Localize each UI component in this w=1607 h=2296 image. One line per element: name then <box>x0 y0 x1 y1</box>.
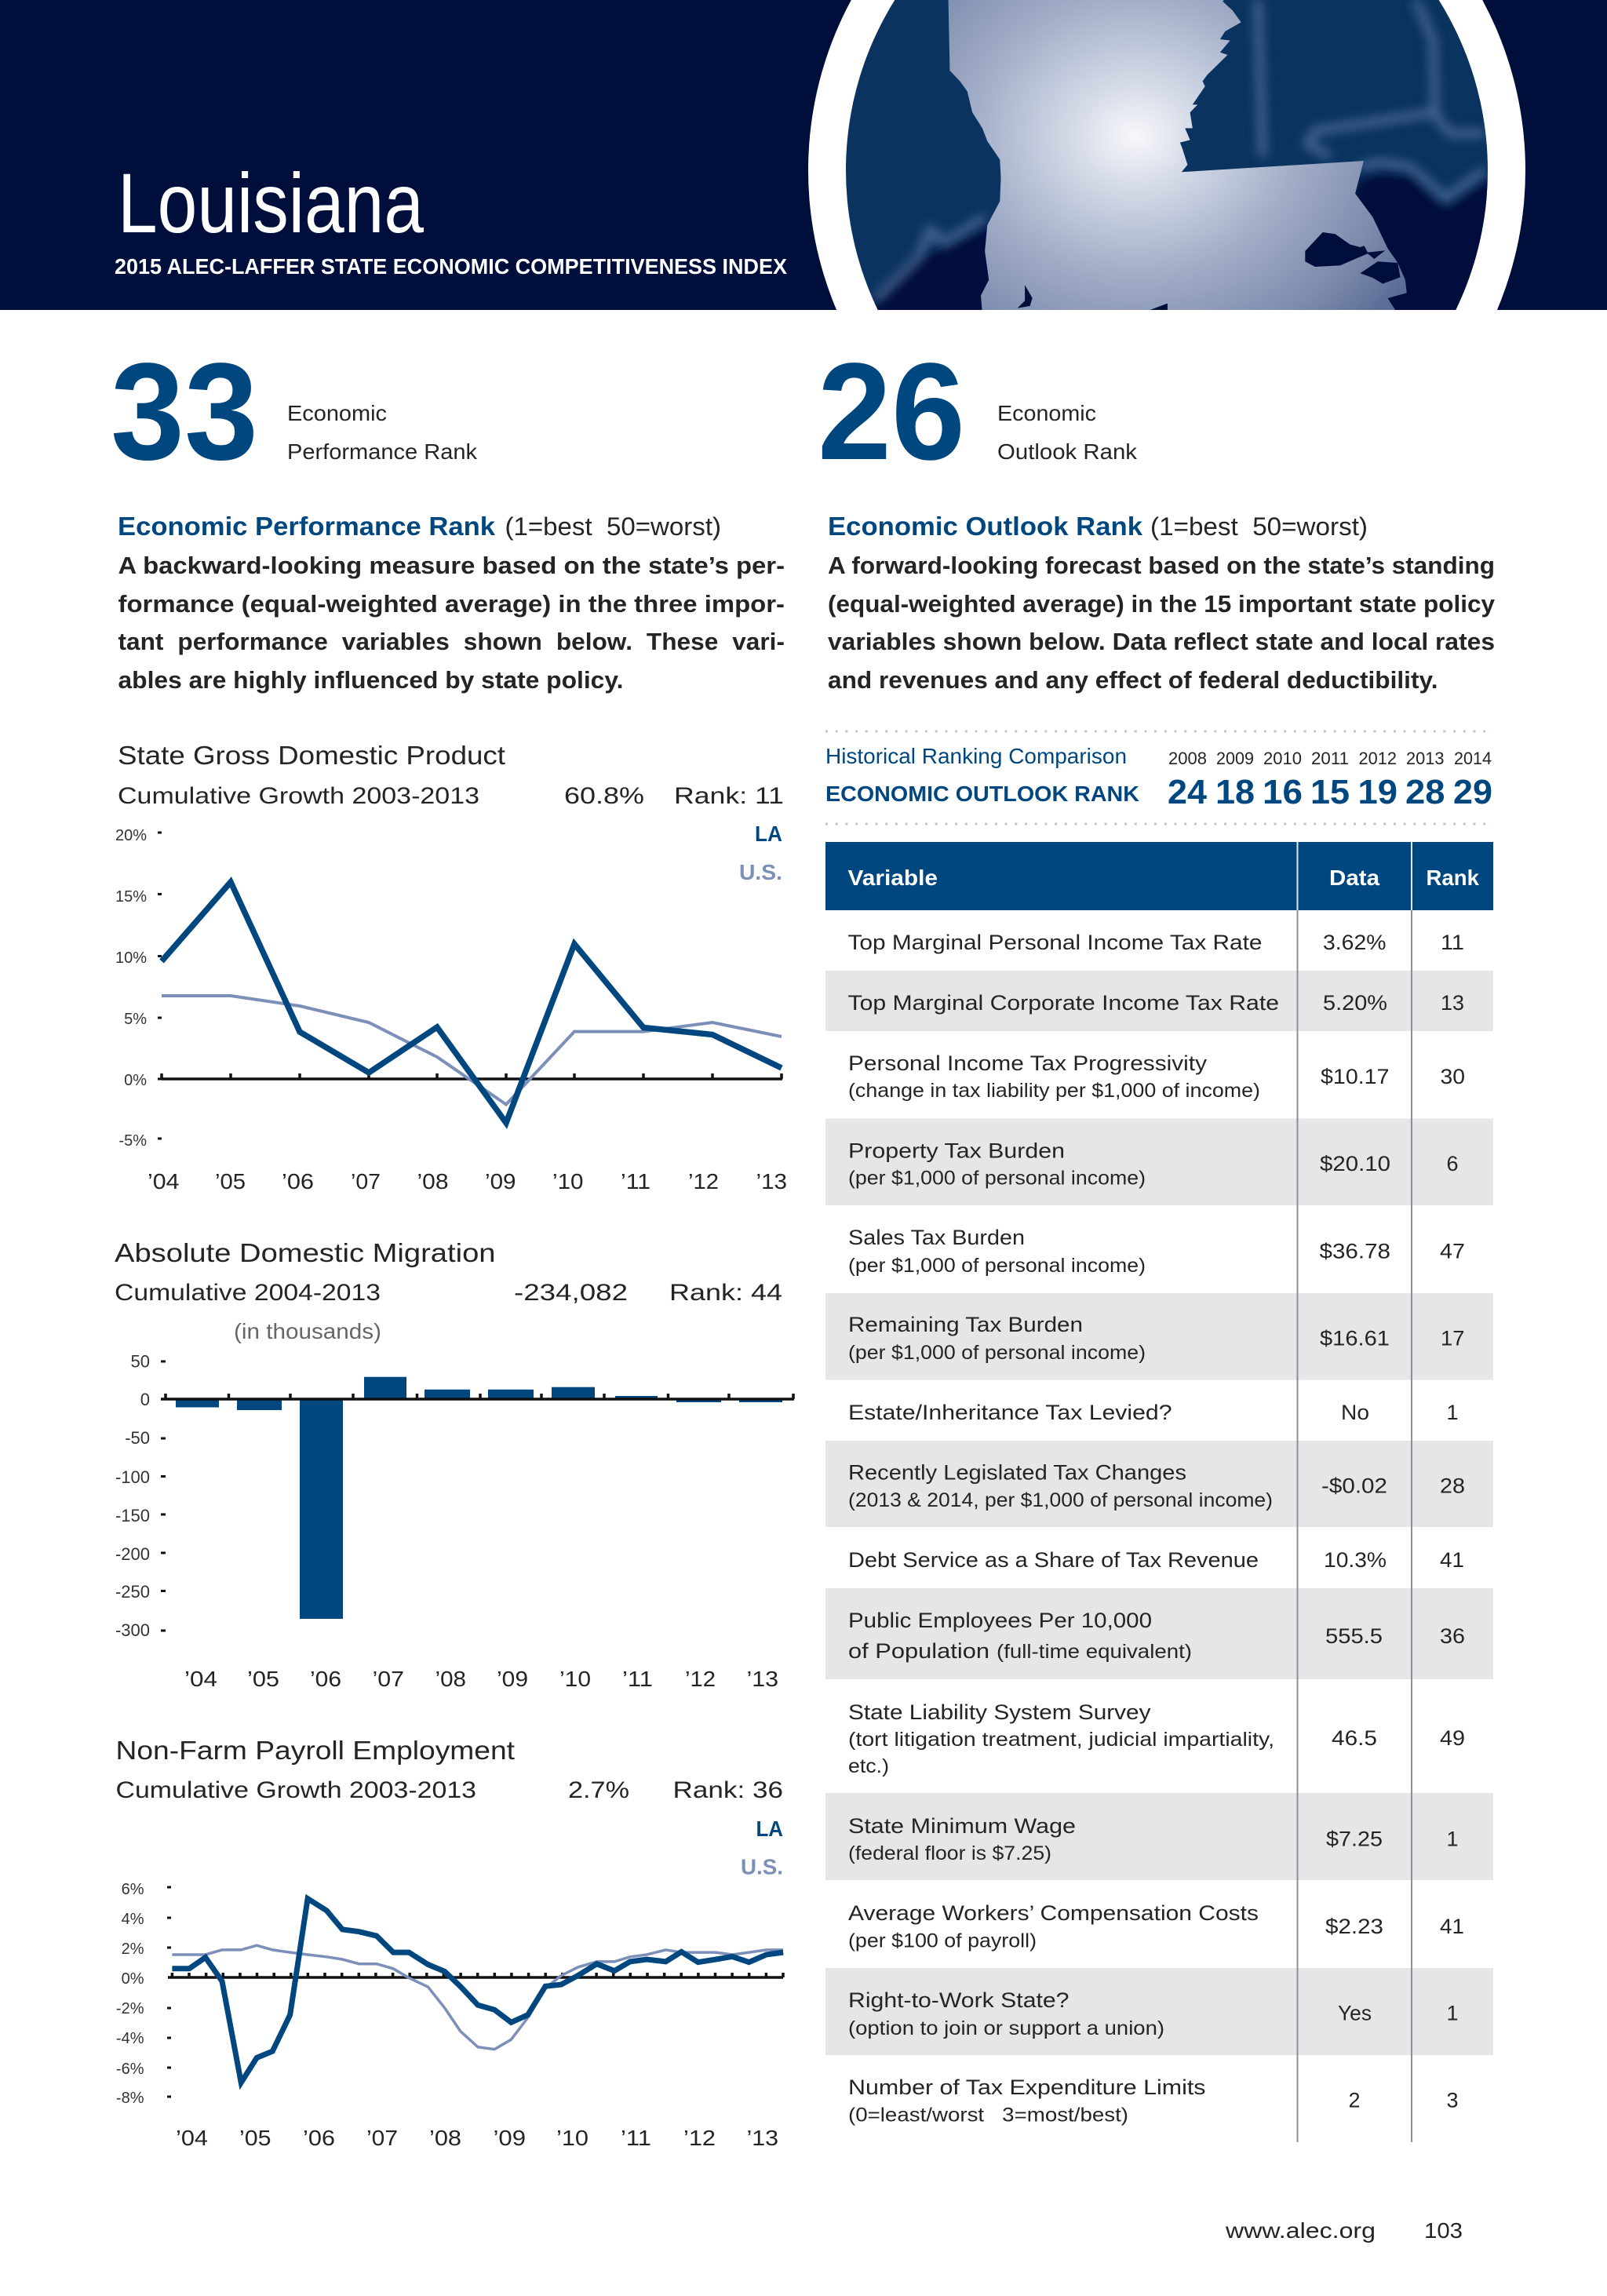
row: property tax burden <box>848 1139 1459 1190</box>
row: workers compensation: (per $100 of payroll) <box>848 1930 1037 1952</box>
row: public employees: 555.5 <box>1325 1624 1383 1648</box>
row: personal income tax progressivity: 30 <box>1441 1065 1465 1088</box>
x axis labels: ’06 <box>282 1169 314 1194</box>
zero axis <box>161 1394 794 1399</box>
title: Louisiana <box>118 155 425 250</box>
x axis labels <box>176 2126 778 2150</box>
row: remaining tax burden: 17 <box>1441 1326 1464 1350</box>
row: personal income tax progressivity: Personal Income Tax Progressivity <box>848 1051 1208 1075</box>
chart heading: Rank: 11 <box>674 783 784 809</box>
years <box>1168 749 1492 768</box>
x axis labels <box>148 1169 787 1194</box>
score: economic outlook rank 26 <box>818 335 1138 489</box>
bars <box>176 1377 782 1619</box>
x axis labels: ’09 <box>497 1667 528 1691</box>
row: top marginal corporate income tax rate: Top Marginal Corporate Income Tax Rate <box>847 991 1279 1015</box>
row: debt service: 41 <box>1440 1548 1464 1572</box>
y axis: -8% <box>116 2090 144 2107</box>
row: debt service: 10.3% <box>1324 1548 1387 1572</box>
footer: www.alec.org <box>1225 2218 1376 2243</box>
years: 2008 <box>1168 749 1207 768</box>
row: personal income tax progressivity <box>848 1051 1465 1102</box>
x axis labels: ’06 <box>310 1667 341 1691</box>
x axis labels: ’10 <box>559 1667 591 1691</box>
y axis: -100 <box>115 1467 150 1487</box>
row: tax expenditure limits <box>848 2076 1459 2127</box>
chart heading <box>118 741 784 809</box>
zero axis <box>162 1073 782 1079</box>
row: state minimum wage <box>848 1814 1459 1864</box>
row: top marginal corporate income tax rate: 5.20% <box>1323 991 1387 1015</box>
x axis labels: ’05 <box>239 2126 271 2150</box>
y axis: -5% <box>118 1132 147 1150</box>
x axis labels: ’13 <box>756 1169 787 1194</box>
row: property tax burden: 6 <box>1446 1152 1459 1175</box>
yearly ranks: 15 <box>1310 773 1350 811</box>
text block: economic performance description: formance (equal-weighted average) in the three impor- <box>118 590 785 618</box>
row: property tax burden: Property Tax Burden <box>848 1139 1065 1163</box>
row: debt service <box>848 1548 1464 1572</box>
yearly ranks: 28 <box>1405 773 1445 811</box>
x axis labels: ’13 <box>747 2126 778 2150</box>
row: remaining tax burden <box>848 1313 1464 1364</box>
row: estate/inheritance tax levied: 1 <box>1446 1401 1459 1424</box>
row: personal income tax progressivity: $10.17 <box>1321 1065 1389 1088</box>
historical ranking comparison: Historical Ranking Comparison <box>825 744 1127 768</box>
x axis labels: ’07 <box>372 1667 404 1691</box>
chart heading: Absolute Domestic Migration <box>115 1238 496 1267</box>
chart heading: Rank: 44 <box>669 1280 782 1306</box>
chart heading: 2.7% <box>568 1777 629 1803</box>
score: economic performance rank 33: Performance Rank <box>287 439 478 464</box>
x axis labels: ’09 <box>485 1169 516 1194</box>
row: right-to-work <box>848 1988 1459 2039</box>
legend <box>739 822 782 884</box>
table header: Rank <box>1427 866 1479 890</box>
text block: economic performance description <box>118 512 785 694</box>
historical ranking comparison: ECONOMIC OUTLOOK RANK <box>825 782 1139 806</box>
yearly ranks: 18 <box>1215 773 1255 811</box>
x axis labels: ’11 <box>622 1667 653 1691</box>
x axis labels <box>184 1667 778 1691</box>
row: state minimum wage: 1 <box>1446 1827 1459 1850</box>
chart heading: State Gross Domestic Product <box>118 741 505 770</box>
row: workers compensation: $2.23 <box>1325 1915 1383 1938</box>
row: property tax burden: $20.10 <box>1320 1152 1390 1175</box>
alternating row shading <box>825 971 1493 2055</box>
row: recently legislated tax changes: 28 <box>1440 1474 1465 1497</box>
y axis: -300 <box>115 1620 150 1640</box>
row: public employees: (full-time equivalent) <box>997 1641 1192 1663</box>
legend <box>741 1817 783 1879</box>
header banner <box>0 0 1607 310</box>
x axis labels: ’04 <box>148 1169 179 1194</box>
row: public employees: 36 <box>1440 1624 1465 1648</box>
row: top marginal personal income tax rate: 11 <box>1441 931 1464 954</box>
text block: economic performance description: Economic Performance Rank <box>118 512 496 541</box>
row: tax expenditure limits: 2 <box>1348 2089 1361 2112</box>
x axis labels: ’05 <box>247 1667 279 1691</box>
row: state liability system survey <box>848 1700 1465 1777</box>
zero axis <box>168 1973 783 1977</box>
row: sales tax burden <box>848 1226 1465 1277</box>
y axis: 2% <box>122 1941 144 1958</box>
y axis: 6% <box>122 1881 144 1898</box>
x axis labels: ’07 <box>351 1169 381 1194</box>
x axis labels: ’10 <box>556 2126 589 2150</box>
row: sales tax burden: 47 <box>1440 1240 1465 1263</box>
legend: LA <box>755 822 782 846</box>
y axis: -250 <box>115 1582 150 1602</box>
row: right-to-work: Right-to-Work State? <box>848 1988 1069 2012</box>
footer: 103 <box>1424 2218 1463 2243</box>
row: estate/inheritance tax levied: Estate/Inheritance Tax Levied? <box>848 1401 1172 1424</box>
row: sales tax burden: $36.78 <box>1320 1240 1390 1263</box>
yearly ranks: 19 <box>1357 773 1397 811</box>
table header <box>825 842 1493 910</box>
row: state liability system survey: 46.5 <box>1332 1726 1377 1750</box>
text block: economic outlook description: A forward-looking forecast based on the state’s standing <box>828 552 1495 579</box>
row: state minimum wage: State Minimum Wage <box>848 1814 1076 1838</box>
text block: economic outlook description: (equal-weighted average) in the 15 important state policy <box>828 590 1496 618</box>
row: state minimum wage: $7.25 <box>1326 1827 1383 1850</box>
years: 2012 <box>1359 749 1397 768</box>
y axis: -2% <box>116 2000 144 2017</box>
row: personal income tax progressivity: (change in tax liability per $1,000 of income) <box>848 1080 1260 1102</box>
y axis <box>115 827 162 1150</box>
chart: absolute domestic migration <box>115 1238 794 1691</box>
y axis: 50 <box>131 1351 150 1372</box>
row: workers compensation: Average Workers’ Compensation Costs <box>848 1901 1259 1925</box>
row: public employees: Public Employees Per 10,000 <box>848 1609 1152 1632</box>
score: economic outlook rank 26: Economic <box>997 401 1096 425</box>
chart heading <box>115 1238 782 1343</box>
y axis: 0% <box>122 1970 144 1988</box>
yearly ranks: 16 <box>1263 773 1303 811</box>
chart heading: Rank: 36 <box>673 1777 783 1803</box>
row: state liability system survey: etc.) <box>848 1755 889 1777</box>
row: remaining tax burden: (per $1,000 of personal income) <box>848 1342 1146 1364</box>
years: 2010 <box>1263 749 1302 768</box>
text block: economic outlook description: (1=best 50=worst) <box>1150 512 1368 541</box>
x axis labels: ’09 <box>493 2126 526 2150</box>
score: economic performance rank 33 <box>111 335 478 489</box>
x axis labels: ’12 <box>683 2126 716 2150</box>
row: top marginal corporate income tax rate: 13 <box>1441 991 1464 1015</box>
legend: U.S. <box>741 1855 783 1879</box>
row: recently legislated tax changes: Recently Legislated Tax Changes <box>848 1461 1186 1485</box>
years: 2014 <box>1454 749 1492 768</box>
row: top marginal personal income tax rate: Top Marginal Personal Income Tax Rate <box>847 931 1262 954</box>
map medallion: Louisiana state in a white ring <box>808 0 1525 310</box>
row: top marginal personal income tax rate <box>847 931 1464 954</box>
score: economic performance rank 33: Economic <box>287 401 387 425</box>
text block: economic performance description: tant performance variables shown below. These vari- <box>118 628 785 655</box>
y axis: 15% <box>115 888 147 906</box>
table header: Data <box>1329 866 1379 890</box>
line: Louisiana <box>172 1899 783 2083</box>
row: property tax burden: (per $1,000 of personal income) <box>848 1168 1146 1190</box>
y axis: 5% <box>124 1011 147 1028</box>
x axis labels: ’11 <box>621 2126 651 2150</box>
row: public employees <box>848 1609 1465 1663</box>
row: state liability system survey: 49 <box>1440 1726 1465 1750</box>
row: right-to-work: (option to join or support a union) <box>848 2017 1164 2039</box>
row: remaining tax burden: $16.61 <box>1320 1326 1390 1350</box>
x axis labels: ’11 <box>621 1169 650 1194</box>
chart heading: (in thousands) <box>234 1319 381 1343</box>
y axis: -200 <box>115 1544 150 1564</box>
x axis labels: ’07 <box>366 2126 398 2150</box>
x axis labels: ’06 <box>303 2126 335 2150</box>
years: 2009 <box>1216 749 1254 768</box>
years: 2011 <box>1311 749 1349 768</box>
y axis: -150 <box>115 1506 150 1525</box>
chart: state gross domestic product <box>115 741 787 1194</box>
legend: U.S. <box>739 860 782 884</box>
y axis: 0 <box>140 1390 150 1409</box>
row: estate/inheritance tax levied: No <box>1341 1401 1369 1424</box>
x axis labels: ’13 <box>747 1667 778 1691</box>
row: remaining tax burden: Remaining Tax Burden <box>848 1313 1083 1336</box>
chart heading: Cumulative 2004-2013 <box>115 1280 381 1306</box>
text block: economic performance description: ables are highly influenced by state policy. <box>118 666 623 694</box>
text block: economic outlook description: and revenues and any effect of federal deductibility. <box>828 666 1438 694</box>
chart heading <box>116 1736 783 1803</box>
y axis: 20% <box>115 827 147 844</box>
text block: economic outlook description <box>828 512 1496 694</box>
line: U.S. <box>162 996 782 1105</box>
row: sales tax burden: (per $1,000 of personal income) <box>848 1255 1146 1277</box>
x axis labels: ’04 <box>184 1667 217 1691</box>
historical ranking comparison <box>825 731 1493 824</box>
row: sales tax burden: Sales Tax Burden <box>848 1226 1025 1249</box>
x axis labels: ’12 <box>688 1169 719 1194</box>
row: tax expenditure limits: (0=least/worst 3=most/best) <box>848 2105 1128 2127</box>
row: state liability system survey: (tort litigation treatment, judicial impartiality, <box>848 1729 1274 1751</box>
score: economic performance rank 33: 33 <box>111 335 258 489</box>
y axis: -6% <box>116 2061 144 2078</box>
chart heading: -234,082 <box>514 1280 628 1306</box>
yearly ranks <box>1168 773 1492 811</box>
chart heading: Cumulative Growth 2003-2013 <box>116 1777 476 1803</box>
y axis <box>115 1351 166 1640</box>
x axis labels: ’08 <box>435 1667 466 1691</box>
row: workers compensation <box>848 1901 1464 1952</box>
y axis: 0% <box>124 1072 147 1089</box>
x axis labels: ’05 <box>215 1169 246 1194</box>
row: estate/inheritance tax levied <box>848 1401 1459 1424</box>
x axis labels: ’08 <box>417 1169 449 1194</box>
row: state minimum wage: (federal floor is $7.25) <box>848 1842 1051 1864</box>
row: state liability system survey: State Liability System Survey <box>848 1700 1151 1724</box>
footer <box>1225 2218 1463 2243</box>
row: top marginal corporate income tax rate <box>847 991 1464 1015</box>
row: right-to-work: 1 <box>1446 2001 1459 2024</box>
x axis labels: ’10 <box>552 1169 584 1194</box>
line: Louisiana <box>162 882 782 1123</box>
y axis: 10% <box>115 949 147 967</box>
years: 2013 <box>1406 749 1444 768</box>
y axis <box>116 1881 171 2107</box>
row: debt service: Debt Service as a Share of Tax Revenue <box>848 1548 1259 1572</box>
chart heading: Non-Farm Payroll Employment <box>116 1736 515 1765</box>
subtitle: 2015 ALEC-LAFFER STATE ECONOMIC COMPETITIVENESS INDEX <box>115 254 787 279</box>
row: workers compensation: 41 <box>1440 1915 1464 1938</box>
legend: LA <box>756 1817 783 1841</box>
chart heading: 60.8% <box>564 783 644 809</box>
row: recently legislated tax changes <box>848 1461 1465 1511</box>
score: economic outlook rank 26: 26 <box>818 335 965 489</box>
row: public employees: of Population <box>848 1639 989 1663</box>
table header: Variable <box>847 866 938 890</box>
y axis: 4% <box>122 1911 144 1928</box>
table: state policy variables <box>825 842 1493 2142</box>
row: recently legislated tax changes: (2013 & 2014, per $1,000 of personal income) <box>848 1489 1273 1511</box>
x axis labels: ’12 <box>685 1667 716 1691</box>
x axis labels: ’04 <box>176 2126 208 2150</box>
yearly ranks: 24 <box>1168 773 1208 811</box>
chart heading: Cumulative Growth 2003-2013 <box>118 783 479 809</box>
chart: non-farm payroll employment <box>116 1736 783 2150</box>
line: U.S. <box>172 1945 783 2050</box>
y axis: -4% <box>116 2030 144 2047</box>
score: economic outlook rank 26: Outlook Rank <box>997 439 1138 464</box>
text block: economic outlook description: Economic Outlook Rank <box>828 512 1143 541</box>
row: tax expenditure limits: Number of Tax Expenditure Limits <box>848 2076 1205 2099</box>
yearly ranks: 29 <box>1453 773 1492 811</box>
row: right-to-work: Yes <box>1338 2001 1372 2024</box>
row: recently legislated tax changes: -$0.02 <box>1321 1474 1387 1497</box>
y axis: -50 <box>125 1428 150 1448</box>
text block: economic performance description: (1=best 50=worst) <box>505 512 721 541</box>
text block: economic outlook description: variables shown below. Data reflect state and local rates <box>828 628 1495 655</box>
row: tax expenditure limits: 3 <box>1446 2089 1459 2112</box>
x axis labels: ’08 <box>429 2126 461 2150</box>
text block: economic performance description: A backward-looking measure based on the state’s per- <box>118 552 785 579</box>
row: top marginal personal income tax rate: 3.62% <box>1323 931 1386 954</box>
